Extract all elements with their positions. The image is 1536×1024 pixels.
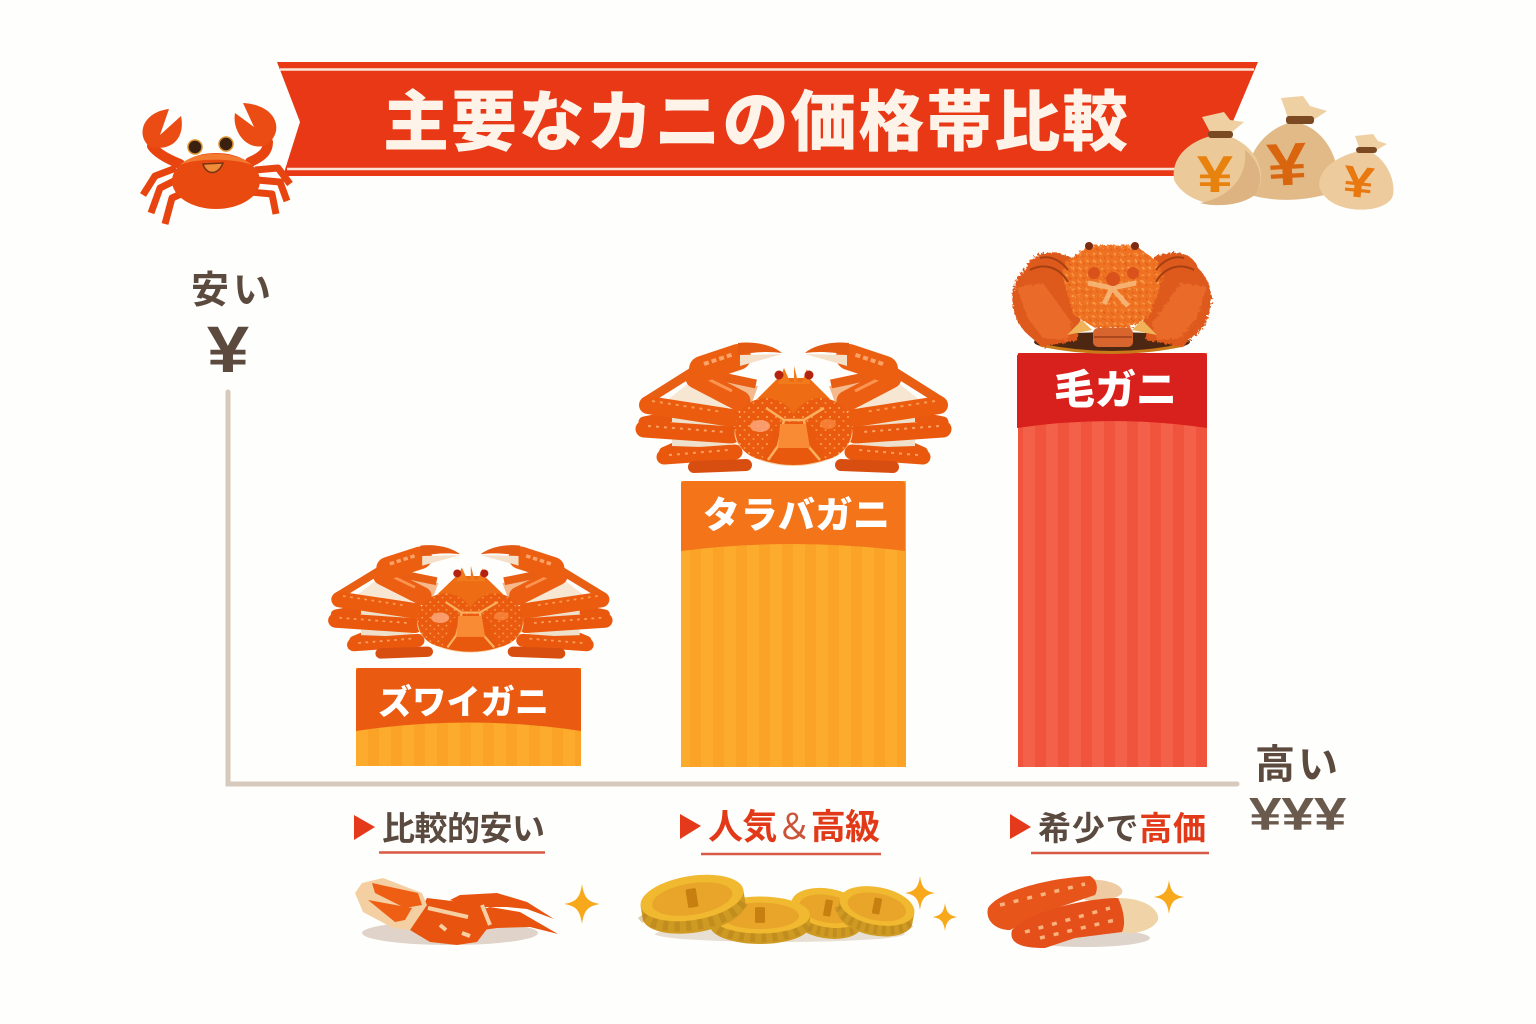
label: popular and premium: 人気＆高級 <box>708 808 880 847</box>
title banner <box>277 62 1258 176</box>
bar: Taraba crab <box>681 481 906 767</box>
y axis label: cheap: 安い <box>191 270 271 312</box>
label: comparatively cheap: 比較的安い <box>382 810 545 847</box>
y axis label: cheap <box>191 270 271 387</box>
bar label: タラバガニ <box>703 495 890 536</box>
icon: sparkle near meat <box>1154 880 1184 914</box>
bag right <box>1319 134 1393 210</box>
icon: sparkle near claw <box>564 884 600 924</box>
bag left <box>1174 112 1261 205</box>
bag large: ¥ <box>1265 131 1309 200</box>
bag left: ¥ <box>1197 146 1233 203</box>
icon: king crab on bar <box>644 343 943 467</box>
label: rare and expensive: 希少で高価 <box>1038 810 1206 847</box>
bar: Zuwai crab <box>356 668 581 766</box>
icon: snow crab on bar <box>336 545 605 653</box>
icon: sparkles near coins <box>905 876 958 931</box>
icon: hairy crab on bar <box>1012 242 1212 352</box>
x axis label: expensive <box>1249 743 1346 840</box>
x axis label: expensive: 高い <box>1255 743 1338 787</box>
x axis label: expensive: ¥¥¥ <box>1249 789 1346 840</box>
title: 主要なカニの価格帯比較 <box>383 85 1128 159</box>
y axis label: cheap: ¥ <box>207 314 250 387</box>
bag large <box>1247 96 1338 200</box>
icon: money bags <box>1174 96 1393 210</box>
icon: crab claw <box>355 878 558 945</box>
bar label: ズワイガニ <box>378 683 549 722</box>
icon: gold coins <box>637 868 918 944</box>
bar: Kegani crab <box>1017 353 1207 767</box>
icon: cartoon crab mascot <box>142 103 290 224</box>
bar label: 毛ガニ <box>1054 367 1177 413</box>
chart axes <box>228 392 1237 784</box>
bag right: ¥ <box>1341 156 1377 208</box>
icon: crab meat <box>987 876 1158 948</box>
